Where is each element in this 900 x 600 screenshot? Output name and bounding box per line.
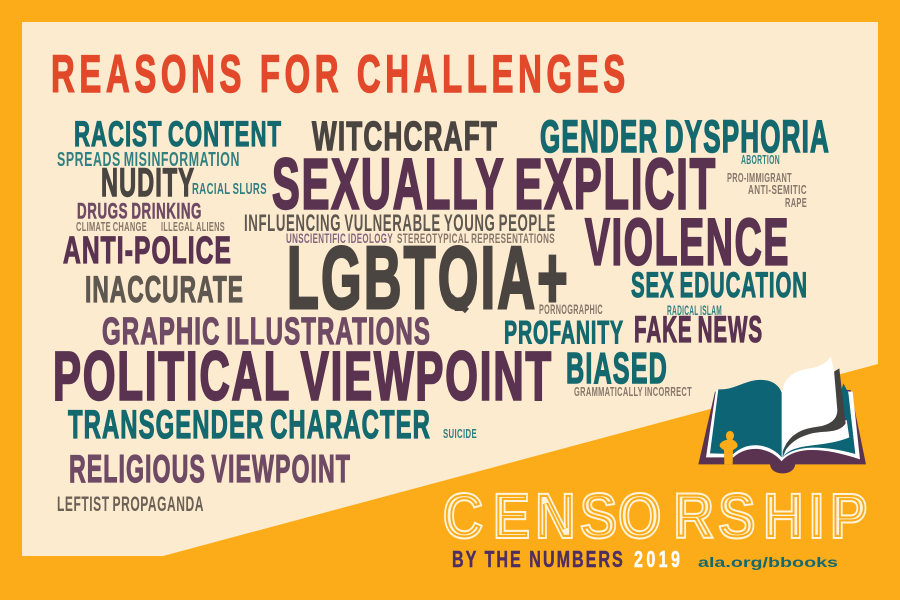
word cloud: POLITICAL VIEWPOINT xyxy=(53,338,553,414)
word cloud: RAPE xyxy=(785,196,807,210)
word cloud: RACIST CONTENT xyxy=(74,114,282,154)
word cloud: CLIMATE CHANGE xyxy=(76,219,147,234)
word cloud: PRO-IMMIGRANT xyxy=(727,171,792,185)
word cloud: BIASED xyxy=(566,344,668,393)
word cloud: WITCHCRAFT xyxy=(312,113,498,159)
word cloud: SPREADS MISINFORMATION xyxy=(57,148,240,171)
subtitle: year: 2019 xyxy=(634,547,680,573)
word cloud: INFLUENCING VULNERABLE YOUNG PEOPLE xyxy=(244,210,556,237)
word cloud: UNSCIENTIFIC IDEOLOGY xyxy=(286,230,393,246)
icon: open book xyxy=(698,357,866,473)
word cloud: NUDITY xyxy=(101,161,195,205)
word cloud: LEFTIST PROPAGANDA xyxy=(57,493,204,516)
logo: censorship striped wordmark: CENSORSHIP xyxy=(443,480,867,552)
word cloud: ANTI-SEMITIC xyxy=(748,183,807,197)
word cloud: DRUGS DRINKING xyxy=(77,199,202,224)
word cloud: PORNOGRAPHIC xyxy=(539,301,603,317)
word cloud: INACCURATE xyxy=(85,269,244,310)
word cloud: RACIAL SLURS xyxy=(192,181,267,198)
subtitle: by the numbers: BY THE NUMBERS xyxy=(452,547,623,573)
word cloud: STEREOTYPICAL REPRESENTATIONS xyxy=(397,230,555,246)
word cloud: GRAMMATICALLY INCORRECT xyxy=(574,384,692,399)
word cloud: GRAPHIC ILLUSTRATIONS xyxy=(102,310,431,353)
website link: ala.org/bbooks xyxy=(698,555,838,570)
icon: orange reader figure xyxy=(720,431,738,464)
word cloud xyxy=(53,111,830,516)
word cloud: RELIGIOUS VIEWPOINT xyxy=(69,448,351,491)
word cloud: TRANSGENDER CHARACTER xyxy=(68,403,431,447)
title: REASONS FOR CHALLENGES xyxy=(51,45,625,104)
word cloud: PROFANITY xyxy=(504,313,624,350)
word cloud: FAKE NEWS xyxy=(634,309,763,350)
word cloud: ILLEGAL ALIENS xyxy=(161,219,225,234)
logo: censorship striped wordmark: CENSORSHIP xyxy=(443,480,867,552)
word cloud: ABORTION xyxy=(741,153,780,167)
word cloud: RADICAL ISLAM xyxy=(667,302,722,318)
word cloud: ANTI-POLICE xyxy=(63,229,232,272)
word cloud: LGBTQIA+ xyxy=(287,228,570,327)
logo: censorship striped wordmark: CENSORSHIP xyxy=(443,480,867,552)
word cloud: SUICIDE xyxy=(443,426,477,441)
